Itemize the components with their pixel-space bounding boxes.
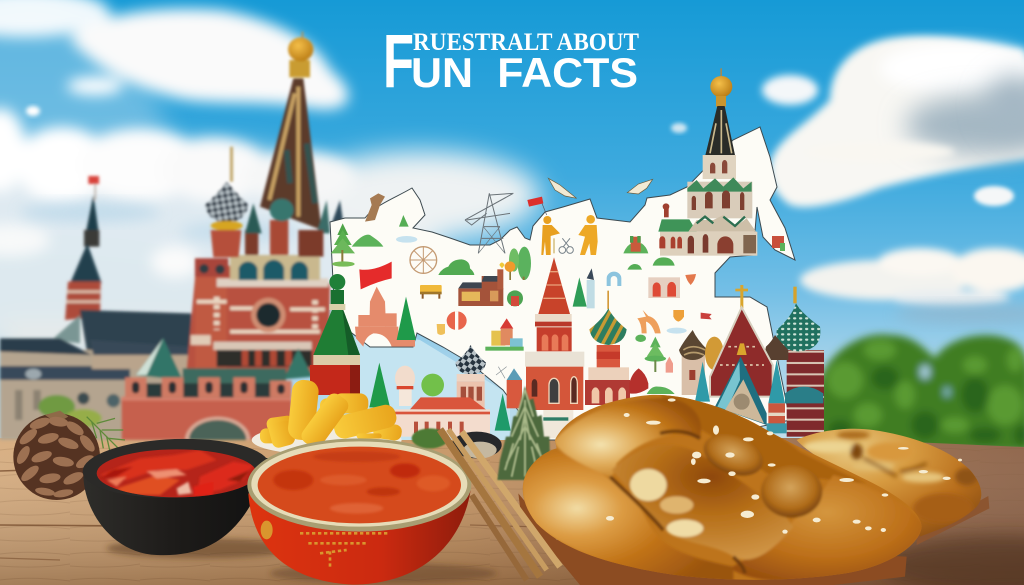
icon: pine tree in sky <box>369 363 390 407</box>
icon: green sphere <box>421 374 444 396</box>
red soup bowl <box>247 438 471 585</box>
salsa chunks <box>100 450 253 497</box>
arches <box>230 255 320 280</box>
icon: figure right <box>578 215 598 255</box>
icon: small village <box>485 318 524 351</box>
icon: white bird right <box>627 179 653 194</box>
icon: patterned dome <box>455 345 486 408</box>
pine sprig <box>87 417 125 452</box>
icon: central red tower <box>525 257 584 438</box>
icon: small white dome <box>395 366 415 406</box>
icon: pale cloud east <box>667 328 687 334</box>
soup highlights <box>273 451 450 514</box>
lobe: upper left <box>553 398 701 478</box>
clouds right <box>671 36 1024 324</box>
title <box>383 19 639 104</box>
icon: small flag <box>701 313 712 319</box>
cathedral top right <box>658 68 757 256</box>
wooden table <box>0 438 1024 585</box>
icon: yellow hand <box>437 324 445 335</box>
title: second line: UN FACTS <box>411 49 638 96</box>
table shadow under bowls <box>107 538 497 583</box>
bottle <box>310 274 360 395</box>
icon: figure left <box>541 216 560 255</box>
icon: orange shield <box>673 310 684 322</box>
pine cone <box>13 411 100 500</box>
icon: brown animal <box>365 193 385 222</box>
sesame seeds <box>606 398 962 534</box>
big flatbread <box>522 393 962 585</box>
icon: hills east <box>627 257 675 270</box>
front red wall with roofs <box>122 338 313 440</box>
bread creases <box>610 431 745 573</box>
icon: pale cloud <box>396 236 417 243</box>
green trees right <box>815 334 1024 452</box>
icon: coral vase <box>666 357 673 373</box>
clouds left and top <box>0 0 540 360</box>
icon: green house <box>623 236 648 253</box>
icon: pine tree <box>397 297 416 340</box>
pale sky under map <box>350 330 510 440</box>
icon: small tree <box>399 215 409 227</box>
checker dome <box>205 147 248 257</box>
title: large F: F <box>383 19 414 104</box>
chopsticks <box>440 429 560 580</box>
icon: red roof palace <box>395 397 490 437</box>
icon: trees and balloon <box>499 247 531 280</box>
icon: yellow bench <box>420 285 442 299</box>
lobe: knob lower <box>761 466 822 518</box>
lobe: centre <box>612 445 793 560</box>
black bowl of salsa <box>82 436 270 555</box>
teal cones <box>695 360 787 433</box>
icon: red balloons <box>447 311 467 330</box>
tower with green dome <box>765 287 824 437</box>
icon: white bird <box>548 178 577 198</box>
bread lobes <box>522 393 923 585</box>
icon: green hill bottom <box>647 386 675 394</box>
icon: small bush <box>635 335 646 342</box>
gable with cross <box>710 285 773 425</box>
lobe: lower right <box>730 475 923 581</box>
icon: large red flag <box>359 262 392 289</box>
icon: green tree <box>645 337 666 372</box>
icon: blue ring <box>607 272 621 286</box>
icon: scissors <box>554 238 573 253</box>
icon: ferris wheel <box>410 247 437 273</box>
icon: power pylon <box>465 193 513 253</box>
icon: dark red dome <box>629 368 648 394</box>
icon: tree top left <box>331 223 355 267</box>
lobe: knob upper <box>703 434 763 477</box>
white illustrated map of Russia <box>330 127 795 440</box>
icon: brown house <box>458 269 503 306</box>
icon: green bush <box>438 259 474 275</box>
icon: coral castle <box>355 287 415 347</box>
small bowl and sprig behind chopsticks <box>412 428 502 458</box>
right onion domes and gable <box>679 285 824 437</box>
map icons <box>331 178 712 438</box>
icon: teal pine <box>495 393 511 431</box>
title: first line: RUESTRALT ABOUT <box>413 27 639 56</box>
right flatbread <box>797 429 981 537</box>
icon: orange antlers <box>637 310 661 333</box>
far east map icon <box>772 236 785 251</box>
icon: green hill <box>352 235 383 247</box>
lobe: lower left <box>522 453 733 585</box>
left background castle <box>0 32 343 440</box>
icon: red arcade building <box>648 277 680 298</box>
fries plate <box>252 379 403 455</box>
icon: scissors west <box>496 367 507 378</box>
icon: small pine and figure <box>573 268 595 308</box>
fries <box>260 379 403 451</box>
icon: striped onion dome <box>585 291 630 405</box>
icon: wreath <box>507 290 523 306</box>
main red tower <box>187 32 343 377</box>
small domes and pinnacles <box>245 199 343 257</box>
dark left dome <box>679 330 724 395</box>
icon: red flag on pole <box>527 197 547 215</box>
icon: orange emblem <box>685 274 696 285</box>
dark roof building <box>0 310 192 440</box>
bread shading <box>803 431 978 523</box>
small pine tree <box>497 386 554 480</box>
spire <box>260 32 322 230</box>
icon: small red tower <box>507 368 522 408</box>
wooden tray <box>518 493 989 585</box>
back tower with red flag <box>65 176 102 320</box>
lobe: back rolls <box>660 393 867 483</box>
